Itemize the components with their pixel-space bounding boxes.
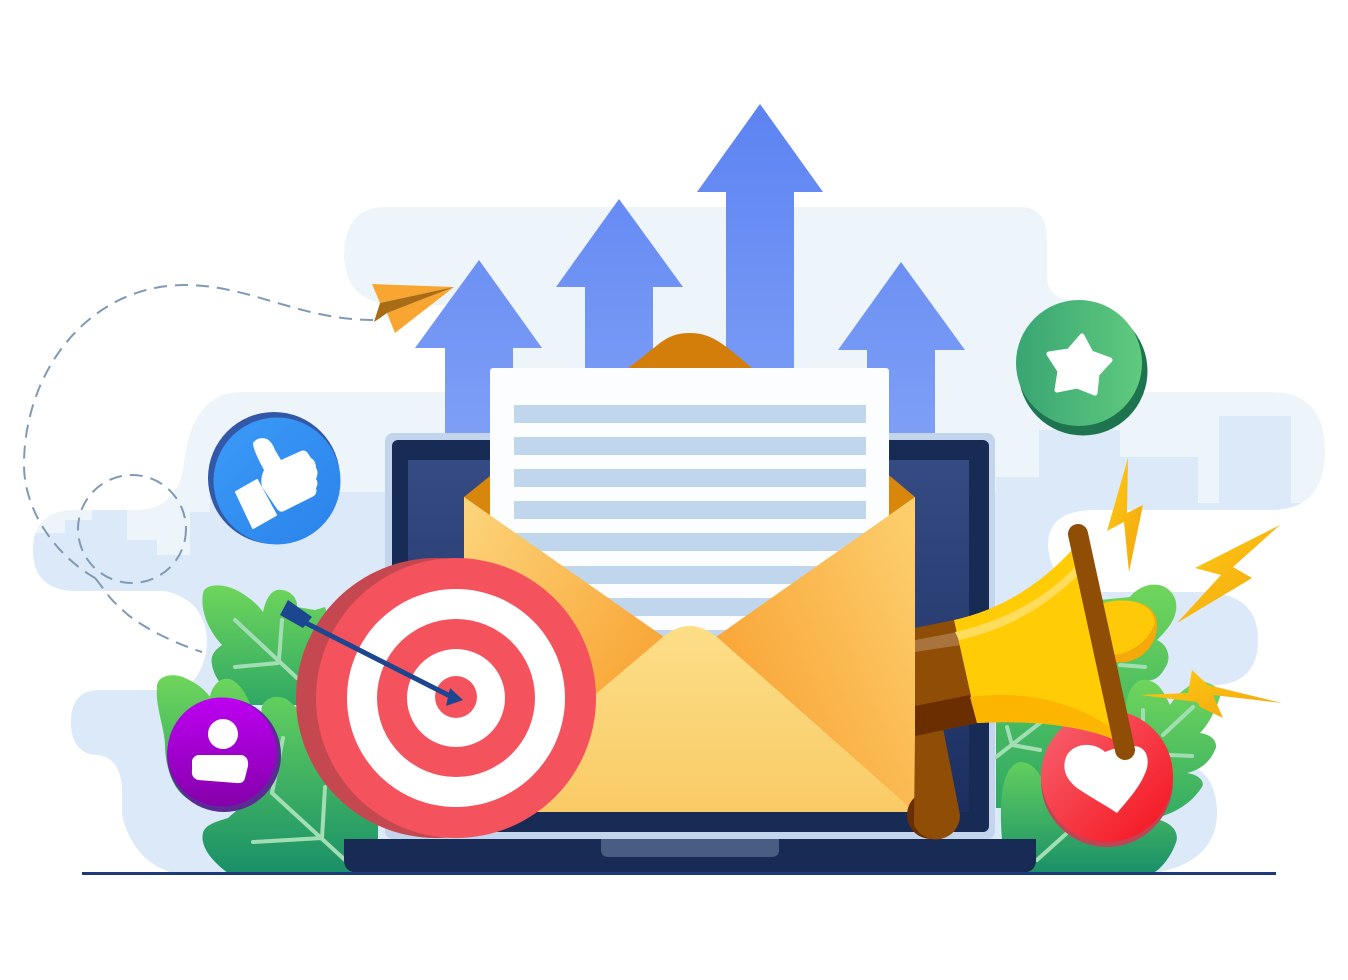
neck bbox=[915, 620, 977, 736]
megaphone bbox=[907, 534, 1157, 839]
laptop screen bbox=[408, 460, 969, 812]
laptop lid bbox=[385, 433, 995, 839]
dashed flight path bbox=[24, 285, 373, 652]
handle bbox=[907, 791, 955, 839]
icon: like badge bbox=[208, 412, 340, 544]
plant left bbox=[157, 585, 378, 873]
icon: heart badge bbox=[1041, 710, 1173, 847]
background blobs with city skyline bbox=[33, 207, 1325, 872]
icon: user badge bbox=[167, 698, 281, 812]
icon: star badge bbox=[1016, 300, 1148, 436]
thumb bbox=[253, 438, 318, 512]
growth arrows bbox=[415, 104, 965, 440]
plant right bbox=[996, 585, 1220, 873]
ground line bbox=[82, 872, 1276, 875]
icon: paper plane bbox=[372, 284, 454, 333]
horn shadow bbox=[970, 695, 1118, 742]
envelope back bbox=[464, 476, 915, 810]
horn highlight bbox=[955, 565, 1079, 640]
arrow in target bbox=[280, 600, 463, 706]
target bbox=[280, 558, 596, 838]
laptop bbox=[344, 433, 1036, 873]
envelope back tip bbox=[628, 333, 752, 368]
laptop base bbox=[344, 839, 1036, 873]
laptop notch bbox=[601, 839, 779, 857]
letter bbox=[490, 368, 889, 668]
envelope front bbox=[457, 497, 915, 812]
icon: lightning bolts bbox=[1107, 458, 1282, 718]
cap bbox=[1103, 601, 1157, 662]
dashed circle bbox=[78, 475, 186, 583]
rod bbox=[1078, 534, 1125, 750]
illustration: email marketing scene bbox=[23, 104, 1325, 875]
horn bbox=[954, 550, 1125, 745]
